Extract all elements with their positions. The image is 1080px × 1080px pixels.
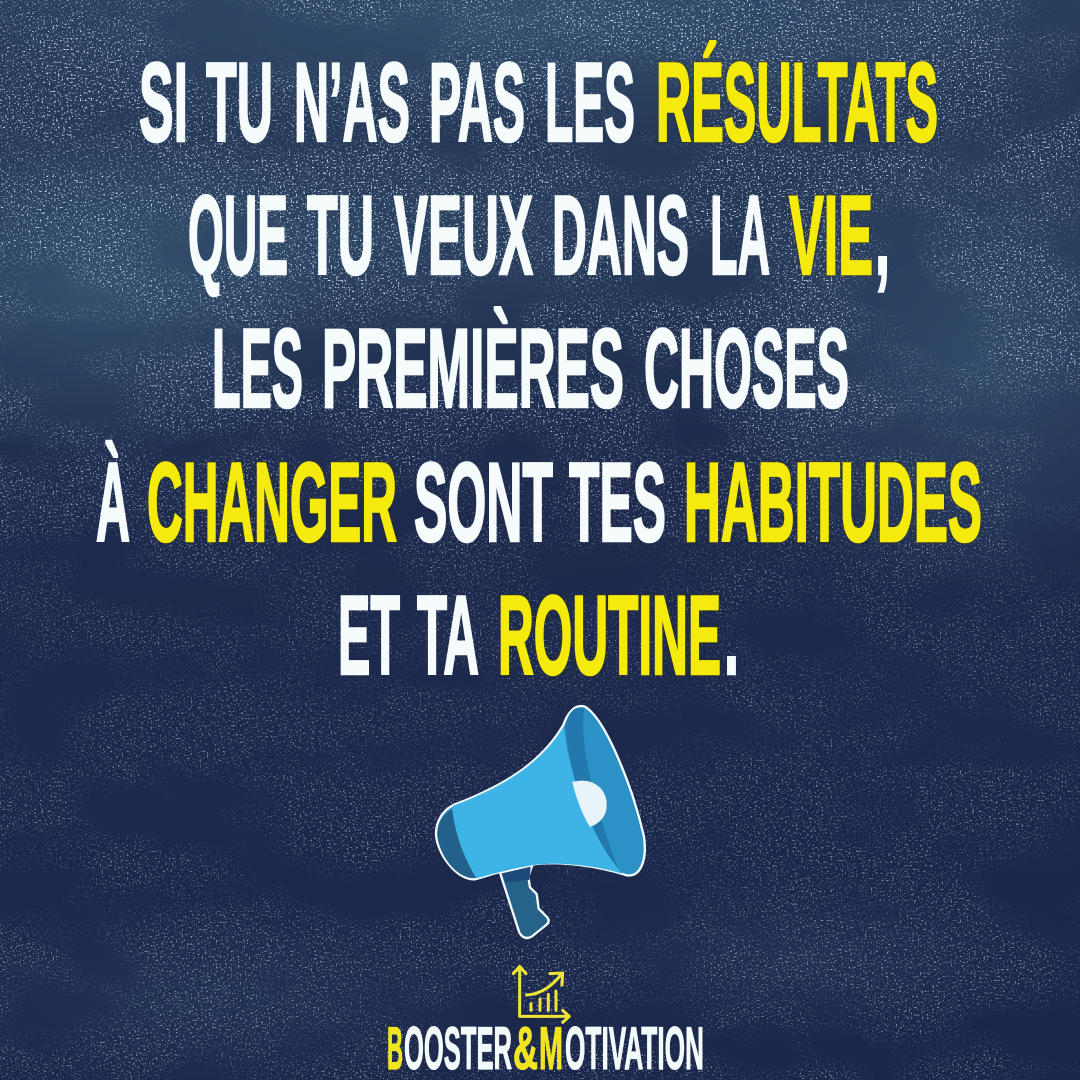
line 1 bbox=[139, 40, 938, 165]
line 4 bbox=[96, 440, 982, 565]
line 1: LES bbox=[545, 40, 635, 165]
logo bbox=[387, 966, 704, 1080]
line 2: QUE bbox=[188, 173, 288, 298]
line 2: TU bbox=[307, 173, 374, 298]
brand name: M bbox=[539, 1015, 563, 1080]
brand name: B bbox=[387, 1015, 403, 1080]
megaphone bell bbox=[436, 706, 645, 879]
megaphone speaker bbox=[572, 781, 607, 827]
megaphone body bbox=[452, 726, 623, 878]
infographic canvas: OTIVATION bbox=[565, 1015, 704, 1080]
icon: growth chart bbox=[513, 966, 569, 1022]
line 2: LA bbox=[710, 173, 770, 298]
line 4: CHANGER bbox=[147, 440, 397, 565]
line 5 bbox=[338, 573, 739, 698]
line 1: N’AS bbox=[294, 40, 410, 165]
headline: . bbox=[724, 573, 739, 698]
headline bbox=[96, 40, 982, 698]
brand name: OOSTER bbox=[404, 1015, 512, 1080]
line 2: DANS bbox=[552, 173, 689, 298]
brand name: & bbox=[513, 1015, 538, 1080]
line 5: TA bbox=[417, 573, 479, 698]
line 2 bbox=[188, 173, 890, 298]
line 3: PREMIÈRES bbox=[322, 306, 624, 431]
icon: megaphone bbox=[436, 706, 645, 938]
headline: , bbox=[875, 173, 890, 298]
line 1: PAS bbox=[429, 40, 525, 165]
line 5: ET bbox=[338, 573, 400, 698]
line 3 bbox=[212, 306, 849, 431]
megaphone handle bbox=[500, 865, 549, 938]
line 4: À bbox=[96, 440, 130, 565]
line 2: VIE bbox=[789, 173, 873, 298]
line 3: LES bbox=[212, 306, 303, 431]
megaphone inner shade bbox=[565, 707, 620, 873]
megaphone rear band bbox=[437, 809, 476, 878]
headline: ROUTINE bbox=[498, 573, 721, 698]
line 4: SONT bbox=[414, 440, 553, 565]
line 4: TES bbox=[569, 440, 666, 565]
line 2: VEUX bbox=[394, 173, 533, 298]
megaphone handle shadow bbox=[502, 867, 531, 883]
line 1: SI bbox=[139, 40, 188, 165]
line 1: TU bbox=[206, 40, 273, 165]
